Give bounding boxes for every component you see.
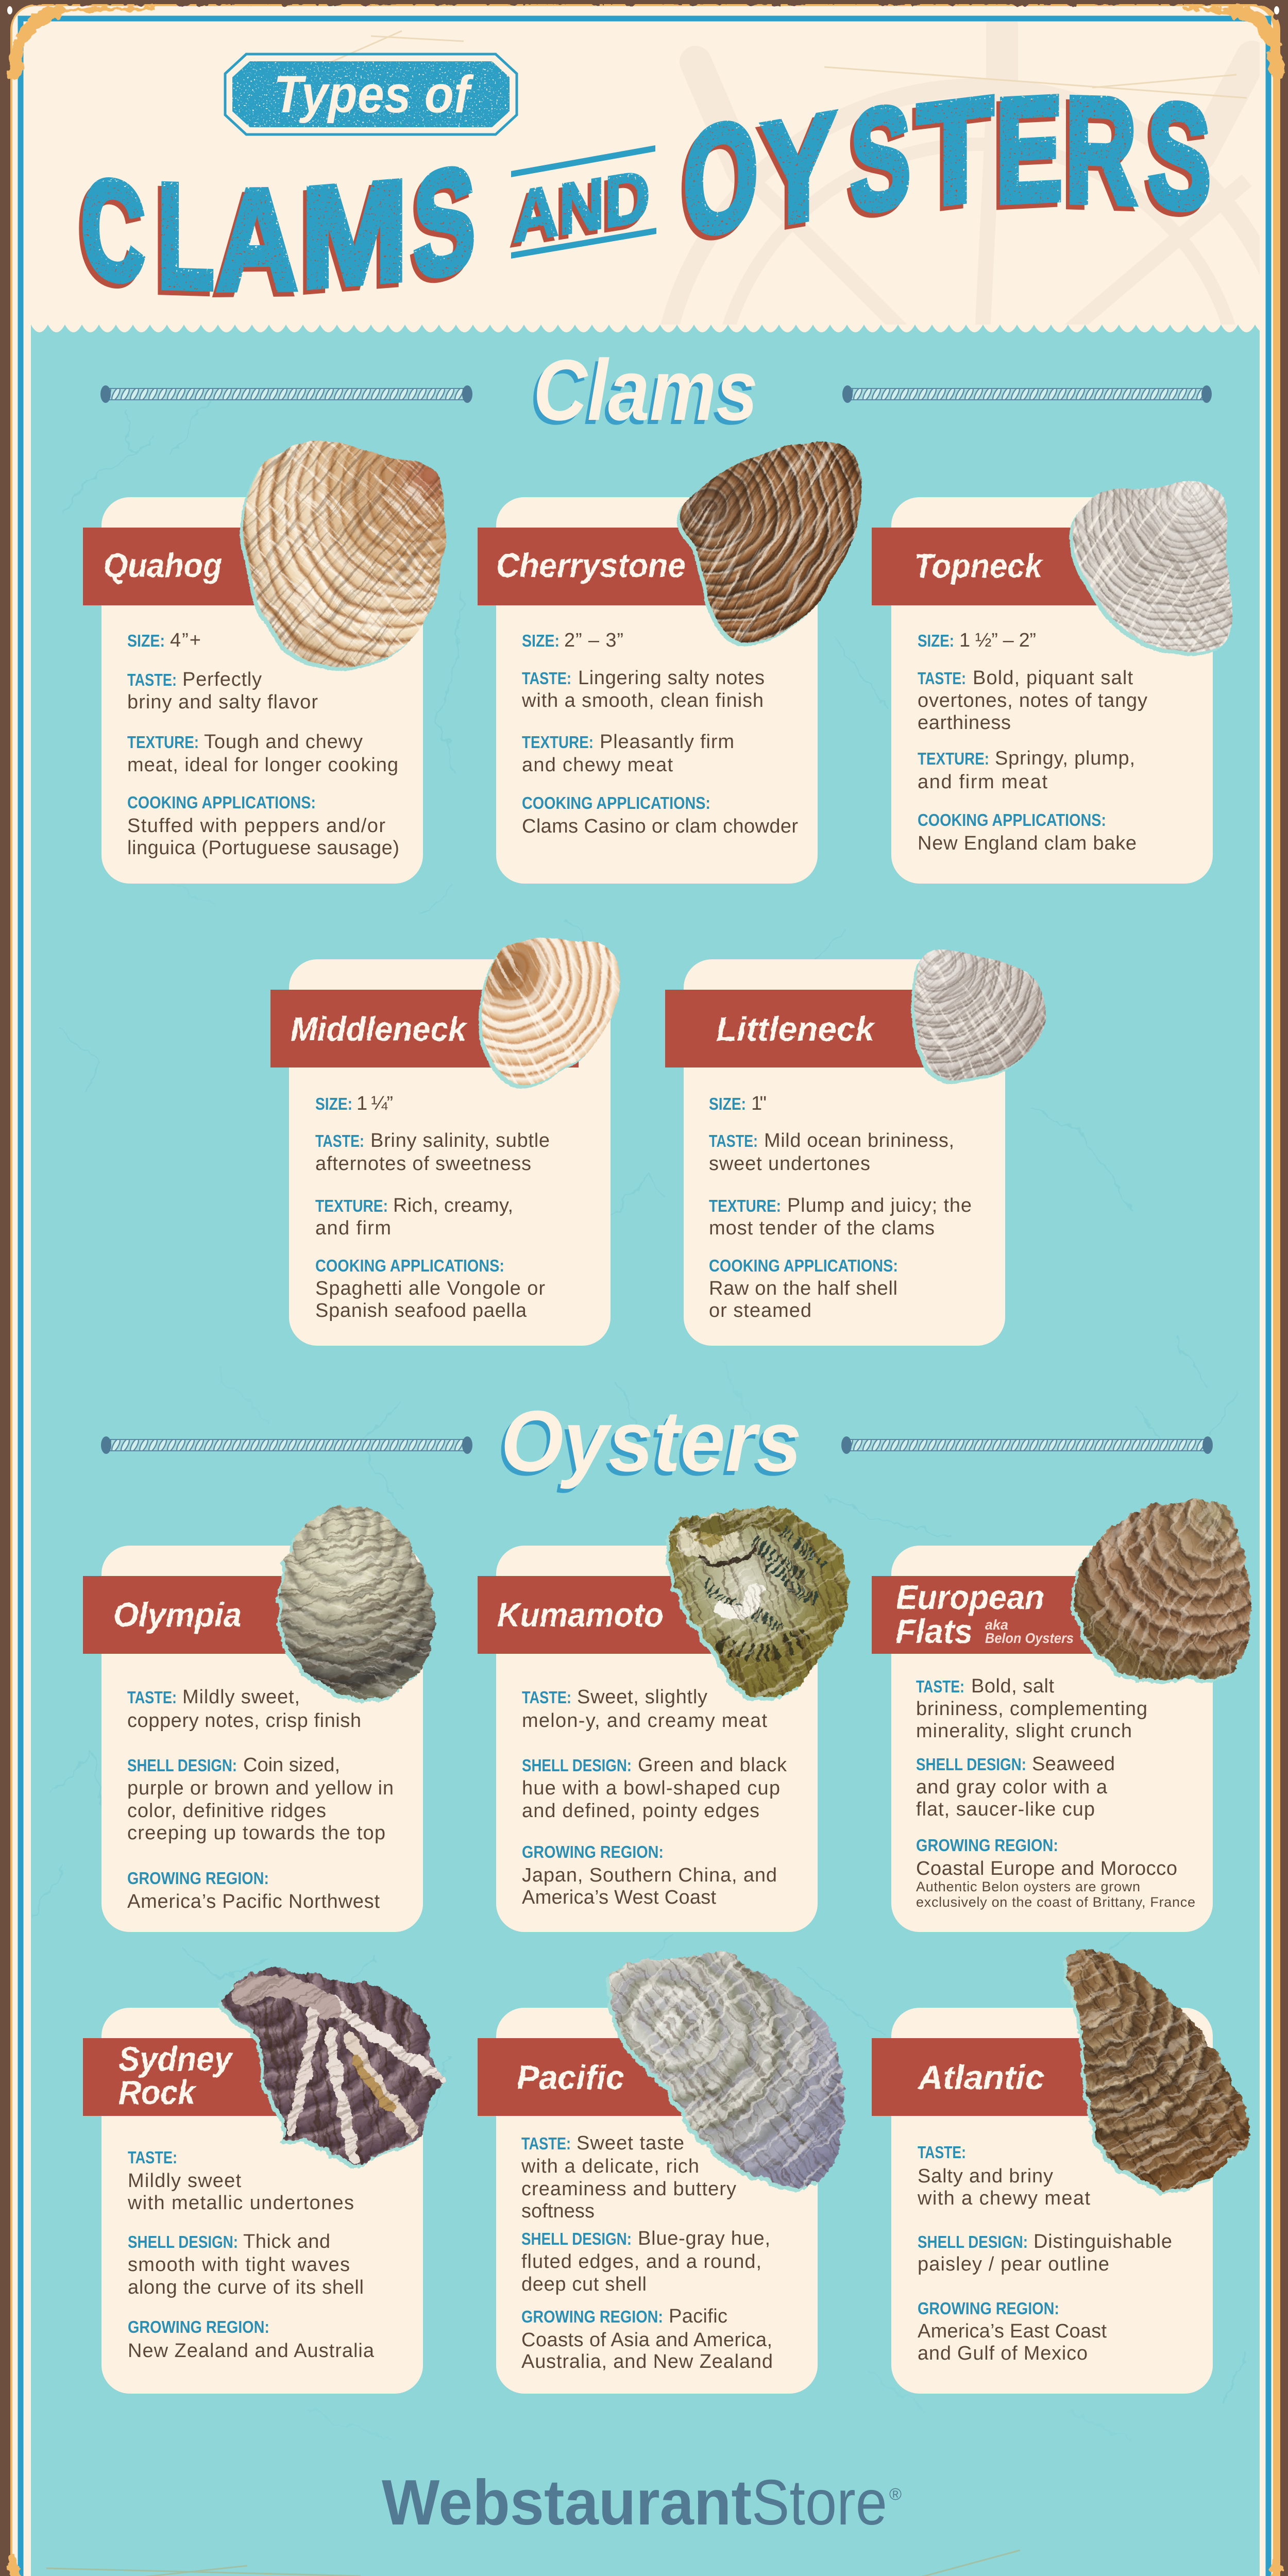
banner: Kumamoto: Kumamoto (497, 1596, 664, 1634)
heading word: OYSTERS: S (850, 75, 911, 243)
text: taste: Briny salinity, subtle (370, 1130, 550, 1151)
text: texture: Plump and juicy; the (787, 1195, 972, 1216)
text: size (522, 630, 623, 651)
panel: Sydney Rock card (83, 1855, 546, 2394)
text: size (918, 630, 1036, 651)
card background (101, 1546, 423, 1932)
text: texture: Tough and chewy (204, 731, 363, 753)
text: shell design (128, 2231, 364, 2298)
text: taste: TASTE: (522, 1688, 571, 1707)
panel: Olympia card (83, 1445, 518, 1932)
text: taste (918, 667, 1147, 734)
card background (496, 497, 818, 884)
heading word: OYSTERS: R (1065, 65, 1137, 236)
section header: Clams (100, 342, 1212, 438)
panel: Cherrystone card (478, 293, 1024, 884)
icon: european flat oyster (949, 1377, 1288, 1807)
text: texture: most tender of the clams (709, 1217, 935, 1239)
text: taste: Sweet taste (577, 2132, 684, 2154)
text: taste (521, 2132, 736, 2222)
text: growing region (522, 1842, 777, 1908)
text: shell design: along the curve of its shell (128, 2277, 364, 2298)
text: cooking applications: COOKING APPLICATIONS: (127, 793, 316, 812)
text: growing region: GROWING REGION: (128, 2317, 269, 2336)
text: shell design (521, 2228, 770, 2295)
text: cooking applications: Spaghetti alle Vongole or (315, 1278, 545, 1299)
text: shell design: Blue-gray hue, (638, 2228, 770, 2249)
panel: European Flats card (872, 1377, 1288, 1932)
icon: sydney rock oyster (124, 1855, 546, 2277)
text: size: 2” – 3” (564, 630, 623, 651)
banner: Olympia: Olympia (113, 1596, 242, 1634)
banner: Olympia (83, 1576, 310, 1654)
heading: Oysters: Oysters (501, 1393, 802, 1489)
text: cooking applications: COOKING APPLICATIONS: (918, 810, 1106, 829)
text: growing region (521, 2306, 773, 2372)
text: taste (127, 669, 318, 713)
rope divider right (841, 1436, 1213, 1454)
text: shell design (127, 1754, 394, 1844)
heading word: CLAMS: L (157, 152, 214, 320)
banner: Cherrystone (478, 528, 786, 605)
text: taste: TASTE: (127, 1688, 177, 1707)
logo: WebstaurantStore: Store (752, 2467, 887, 2538)
text: shell design: Coin sized, (243, 1754, 340, 1776)
text: shell design: SHELL DESIGN: (127, 1756, 237, 1775)
card background (684, 959, 1005, 1346)
text: taste: TASTE: (521, 2134, 571, 2153)
card background (891, 1546, 1213, 1932)
heading word: CLAMS (81, 134, 476, 320)
text: shell design: Green and black (638, 1754, 787, 1776)
banner: Quahog: Quahog (104, 546, 222, 584)
text: size (709, 1093, 767, 1114)
text: texture (709, 1195, 972, 1239)
text: taste: Lingering salty notes (578, 667, 765, 689)
text: taste: afternotes of sweetness (315, 1153, 531, 1175)
text: texture: and chewy meat (522, 754, 673, 776)
text: shell design: purple or brown and yellow in (127, 1777, 394, 1799)
heading word: OYSTERS: S (1147, 71, 1211, 242)
text: taste: with metallic undertones (127, 2192, 354, 2214)
text: growing region: America’s West Coast (522, 1887, 716, 1908)
banner: European Flats: aka (985, 1617, 1008, 1633)
text: size (127, 630, 201, 651)
panel: Topneck card (872, 349, 1288, 884)
card background (891, 497, 1213, 884)
text: texture: Pleasantly firm (600, 731, 734, 753)
text: taste: TASTE: (522, 669, 571, 688)
text: taste: brininess, complementing (916, 1698, 1147, 1720)
text: texture: TEXTURE: (315, 1196, 388, 1215)
header scratches (273, 31, 1247, 98)
banner: European Flats: Belon Oysters (985, 1630, 1074, 1646)
text: cooking applications (315, 1256, 545, 1321)
text: taste: Mildly sweet (128, 2170, 241, 2192)
text: size: SIZE: (709, 1094, 746, 1113)
text: growing region: Japan, Southern China, and (522, 1865, 777, 1886)
text: shell design (916, 1753, 1115, 1820)
card background (496, 1546, 818, 1932)
text: texture: Springy, plump, (995, 748, 1135, 769)
text: taste: creaminess and buttery (521, 2178, 736, 2200)
heading word: CLAMS: A (216, 159, 298, 320)
text: texture: TEXTURE: (522, 733, 594, 752)
panel: Atlantic card (872, 1856, 1288, 2394)
banner: Quahog (83, 528, 391, 605)
card background (101, 2008, 423, 2394)
text: taste: minerality, slight crunch (916, 1720, 1132, 1742)
text: size: 4”+ (170, 630, 201, 651)
text: cooking applications: or steamed (709, 1300, 811, 1321)
text: shell design: color, definitive ridges (127, 1800, 326, 1822)
text: growing region (916, 1836, 1195, 1910)
text: taste: with a chewy meat (917, 2188, 1090, 2209)
panel: Kumamoto card (478, 1396, 969, 1932)
text: taste: melon-y, and creamy meat (522, 1710, 767, 1732)
text: growing region: Australia, and New Zealand (521, 2351, 773, 2372)
text: taste (521, 667, 765, 711)
logo: WebstaurantStore: ® (889, 2485, 902, 2503)
heading word: OYSTERS (683, 65, 1211, 270)
panel: Quahog card (83, 440, 447, 884)
text: taste: coppery notes, crisp finish (127, 1710, 361, 1732)
text: taste (522, 1686, 767, 1732)
text: texture (127, 731, 398, 776)
text: cooking applications: New England clam bake (918, 833, 1137, 854)
card background (289, 959, 611, 1346)
text: growing region (128, 2317, 375, 2362)
text: taste: earthiness (918, 712, 1011, 734)
text: shell design (918, 2231, 1172, 2275)
banner: Sydney Rock (83, 2038, 289, 2116)
icon: cherrystone shell (522, 293, 1024, 794)
text: cooking applications (127, 793, 399, 859)
panel: Middleneck card (270, 839, 733, 1346)
text: taste: sweet undertones (709, 1153, 870, 1175)
text: shell design: fluted edges, and a round, (521, 2251, 761, 2273)
icon: atlantic oyster (944, 1856, 1288, 2286)
text: taste (127, 2148, 354, 2214)
text: texture: TEXTURE: (918, 749, 989, 768)
text: cooking applications: Clams Casino or clam chowder (522, 816, 798, 837)
text: taste: Sweet, slightly (577, 1686, 707, 1708)
title block (81, 54, 1211, 320)
text: taste: TASTE: (709, 1131, 758, 1150)
text: cooking applications: COOKING APPLICATIONS: (522, 793, 710, 812)
logo: WebstaurantStore: Webstaurant (382, 2467, 752, 2538)
banner: European Flats: European (896, 1578, 1044, 1616)
heading word: AND: AND (513, 155, 650, 258)
text: shell design: smooth with tight waves (128, 2254, 350, 2276)
text: taste: TASTE: (128, 2148, 177, 2167)
plaque: Types of (225, 54, 517, 134)
text: growing region (918, 2299, 1107, 2364)
banner: Cherrystone: Cherrystone (496, 546, 686, 584)
icon: kumamoto oyster (546, 1396, 969, 1819)
banner: Middleneck (270, 990, 579, 1067)
text: shell design: Thick and (243, 2231, 330, 2252)
text: shell design: SHELL DESIGN: (916, 1755, 1026, 1774)
text: taste: briny and salty flavor (127, 691, 318, 713)
text: growing region: GROWING REGION: (522, 1842, 664, 1861)
text: shell design: creeping up towards the top (127, 1822, 385, 1844)
text: taste: overtones, notes of tangy (918, 690, 1147, 711)
text: texture (315, 1195, 513, 1239)
rope divider left (100, 385, 472, 403)
banner: Kumamoto (478, 1576, 735, 1654)
heading word: OYSTERS: Y (761, 81, 836, 259)
watermark: ship wheel (660, 22, 1260, 325)
text: shell design: SHELL DESIGN: (128, 2232, 238, 2251)
text: shell design: SHELL DESIGN: (522, 1756, 632, 1775)
text: cooking applications: linguica (Portuguese sausage) (127, 837, 399, 859)
text: shell design (522, 1754, 787, 1822)
text: taste: Salty and briny (918, 2165, 1053, 2187)
text: shell design: and defined, pointy edges (522, 1800, 759, 1822)
banner: European Flats: Flats (895, 1612, 973, 1650)
text: texture (918, 748, 1135, 793)
text: growing region: New Zealand and Australia (128, 2340, 375, 2362)
text: size: SIZE: (127, 631, 165, 650)
plaque: Types of: Types of (274, 65, 474, 124)
text: taste (315, 1130, 550, 1175)
text: taste: TASTE: (918, 669, 966, 688)
icon: quahog shell (85, 299, 595, 809)
heading word: OYSTERS: O (683, 86, 758, 270)
text: growing region: America’s Pacific Northwest (127, 1891, 380, 1912)
text: growing region (127, 1869, 380, 1912)
panel: Littleneck card (665, 828, 1160, 1346)
text: shell design: Seaweed (1032, 1753, 1115, 1775)
text: size: 1 ¼” (357, 1093, 393, 1114)
bottom weathering scratches (46, 2550, 1020, 2576)
icon: middleneck shell (380, 839, 733, 1191)
heading: Clams: Clams (533, 342, 758, 438)
heading word: CLAMS: C (81, 145, 145, 315)
text: size: 1 ½” – 2” (959, 630, 1036, 651)
icon: topneck shell (931, 349, 1288, 785)
text: cooking applications: Spanish seafood paella (315, 1300, 527, 1321)
banner: Littleneck (665, 990, 933, 1067)
section header: Oysters (101, 1393, 1213, 1489)
text: cooking applications: Stuffed with peppers and/or (127, 815, 385, 837)
text: growing region: Coastal Europe and Morocco (916, 1858, 1177, 1879)
text: cooking applications: COOKING APPLICATIONS: (709, 1256, 898, 1275)
text: taste: TASTE: (127, 670, 177, 689)
text: growing region: and Gulf of Mexico (918, 2343, 1088, 2364)
text: growing region: Pacific (669, 2306, 727, 2327)
text: texture: meat, ideal for longer cooking (127, 754, 398, 776)
rope divider right (842, 385, 1212, 403)
text: growing region: America’s East Coast (918, 2320, 1107, 2342)
marble veins (31, 392, 1247, 2442)
panel: Pacific card (478, 1848, 965, 2394)
text: taste: TASTE: (315, 1131, 364, 1150)
text: growing region: GROWING REGION: (916, 1836, 1058, 1855)
icon: littleneck shell (798, 828, 1160, 1191)
text: size: SIZE: (522, 631, 560, 650)
text: shell design: Distinguishable (1033, 2231, 1172, 2252)
heading word: CLAMS: M (301, 150, 408, 318)
text: texture (522, 731, 734, 776)
text: texture: and firm meat (918, 771, 1047, 793)
text: size: SIZE: (918, 631, 954, 650)
card background (101, 497, 423, 884)
text: taste: with a delicate, rich (521, 2156, 699, 2177)
text: taste: Mildly sweet, (182, 1686, 300, 1708)
text: taste: with a smooth, clean finish (521, 690, 764, 711)
text: growing region: Coasts of Asia and America, (521, 2329, 772, 2351)
banner: Littleneck: Littleneck (716, 1010, 876, 1048)
banner: Sydney Rock: Rock (118, 2073, 197, 2111)
banner: Pacific (478, 2038, 694, 2116)
heading word: CLAMS: S (413, 134, 476, 311)
text: size (315, 1093, 393, 1114)
text: shell design: SHELL DESIGN: (521, 2229, 632, 2248)
banner: Atlantic (872, 2038, 1098, 2116)
banner: Middleneck: Middleneck (291, 1010, 468, 1048)
banner: Sydney Rock: Sydney (118, 2040, 233, 2078)
card background (891, 2008, 1213, 2394)
text: cooking applications: Raw on the half shell (709, 1278, 897, 1299)
text: growing region: GROWING REGION: (127, 1869, 269, 1888)
text: taste (127, 1686, 361, 1732)
text: taste: Bold, piquant salt (973, 667, 1133, 689)
text: shell design: and gray color with a (916, 1776, 1108, 1798)
text: texture: TEXTURE: (127, 733, 199, 752)
text: taste (916, 1675, 1147, 1742)
text: size: 1" (751, 1093, 767, 1114)
banner: European Flats (872, 1576, 1098, 1654)
text: cooking applications (522, 793, 798, 837)
text: cooking applications: COOKING APPLICATIONS: (315, 1256, 504, 1275)
text: size: SIZE: (315, 1094, 352, 1113)
banner: Topneck (872, 528, 1119, 605)
scalloped edge (31, 325, 1260, 334)
text: taste: Perfectly (182, 669, 262, 690)
icon: olympia oyster (203, 1445, 518, 1760)
text: shell design: flat, saucer-like cup (916, 1799, 1095, 1820)
text: texture: Rich, creamy, (393, 1195, 513, 1216)
text: shell design: deep cut shell (521, 2274, 647, 2295)
text: texture: and firm (315, 1217, 391, 1239)
card background (496, 2008, 818, 2394)
rope divider left (101, 1436, 472, 1454)
text: taste: softness (521, 2200, 595, 2222)
heading word: OYSTERS: T (917, 66, 993, 238)
banner: Topneck: Topneck (914, 547, 1044, 585)
text: cooking applications (709, 1256, 898, 1321)
banner: Pacific: Pacific (517, 2058, 624, 2096)
text: shell design: SHELL DESIGN: (918, 2232, 1028, 2251)
text: growing region: Authentic Belon oysters are grown (916, 1879, 1140, 1894)
banner: Atlantic: Atlantic (917, 2058, 1044, 2096)
heading word: OYSTERS: E (995, 65, 1063, 234)
text: taste: TASTE: (916, 1677, 964, 1696)
text: shell design: hue with a bowl-shaped cup (522, 1777, 780, 1799)
text: taste: TASTE: (918, 2143, 966, 2162)
icon: pacific oyster (498, 1848, 965, 2315)
text: taste (709, 1130, 954, 1175)
text: taste: Bold, salt (971, 1675, 1054, 1697)
text: growing region: GROWING REGION: (521, 2307, 663, 2326)
text: cooking applications (918, 810, 1137, 854)
text: texture: TEXTURE: (709, 1196, 781, 1215)
text: taste: Mild ocean brininess, (764, 1130, 954, 1151)
text: growing region: exclusively on the coast of Brittany, France (916, 1894, 1195, 1910)
text: growing region: GROWING REGION: (918, 2299, 1059, 2318)
text: shell design: paisley / pear outline (918, 2253, 1109, 2275)
text: taste (917, 2143, 1090, 2209)
